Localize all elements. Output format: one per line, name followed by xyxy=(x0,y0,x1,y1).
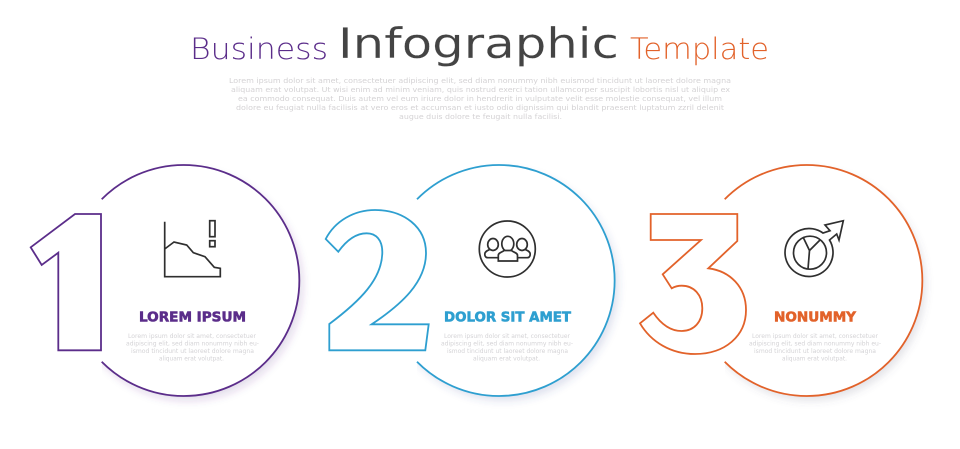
intro text block: augue duis dolore te feugait nulla facilisi. xyxy=(399,112,562,121)
intro text block: aliquam erat volutpat. Ut wisi enim ad minim veniam, quis nostrud exerci tation ullamcorper suscipit lobortis nisl ut aliquip ex xyxy=(231,85,731,94)
intro text block: Lorem ipsum dolor sit amet, consectetuer adipiscing elit, sed diam nonummy nibh euismod tincidunt ut laoreet dolore magna xyxy=(229,76,731,85)
disc with shadow xyxy=(417,187,622,404)
number 2 xyxy=(326,210,429,350)
body text: ismod tincidunt ut laoreet dolore magna xyxy=(447,348,568,355)
body text: Lorem ipsum dolor sit amet, consectetuer xyxy=(752,333,879,340)
number 3 xyxy=(640,214,746,354)
icon: declining chart with exclamation mark xyxy=(165,221,220,277)
body text: Lorem ipsum dolor sit amet, consectetuer xyxy=(444,333,571,340)
body text: Lorem ipsum dolor sit amet, consectetuer xyxy=(128,333,257,340)
intro text block: dolore eu feugiat nulla facilisis at vero eros et accumsan et iusto odio dignissim qui blandit praesent luptatum zzril delenit xyxy=(236,103,724,112)
disc with shadow xyxy=(102,188,306,404)
body text: ismod tincidunt ut laoreet dolore magna xyxy=(754,348,876,355)
panel: step 2 xyxy=(326,165,615,396)
circle outline arc xyxy=(102,165,299,396)
panel: step 3 xyxy=(640,165,922,396)
intro text block: ea commodo consequat. Duis autem vel eum iriure dolor in hendrerit in vulputate velit esse molestie consequat, vel illum xyxy=(238,94,722,103)
title word: Template: Template xyxy=(630,32,769,66)
body text: adipiscing elit, sed diam nonummy nibh eu- xyxy=(441,340,573,348)
body text: aliquam erat volutpat. xyxy=(782,356,847,362)
title word: Infographic: Infographic xyxy=(338,19,619,68)
number 1 xyxy=(31,214,101,350)
heading: DOLOR SIT AMET xyxy=(444,310,572,326)
title word: Business: Business xyxy=(190,32,328,66)
body text xyxy=(441,333,573,362)
disc with shadow xyxy=(725,209,928,403)
body text: adipiscing elit, sed diam nonummy nibh eu- xyxy=(749,340,881,348)
body text: aliquam erat volutpat. xyxy=(473,356,540,362)
panel: step 1 xyxy=(31,165,299,396)
intro text block xyxy=(229,76,731,121)
body text: aliquam erat volutpat. xyxy=(159,356,224,362)
title xyxy=(190,19,769,68)
heading: NONUMMY xyxy=(774,310,856,326)
circle outline arc xyxy=(725,165,922,396)
heading: LOREM IPSUM xyxy=(139,310,246,326)
body text: adipiscing elit, sed diam nonummy nibh eu- xyxy=(126,340,259,348)
circle outline arc xyxy=(417,165,615,396)
body text: ismod tincidunt ut laoreet dolore magna xyxy=(131,348,254,355)
icon: pie chart with arrow xyxy=(785,221,843,277)
body text xyxy=(126,333,259,362)
body text xyxy=(749,333,881,362)
icon: group of people in circle xyxy=(479,221,535,277)
